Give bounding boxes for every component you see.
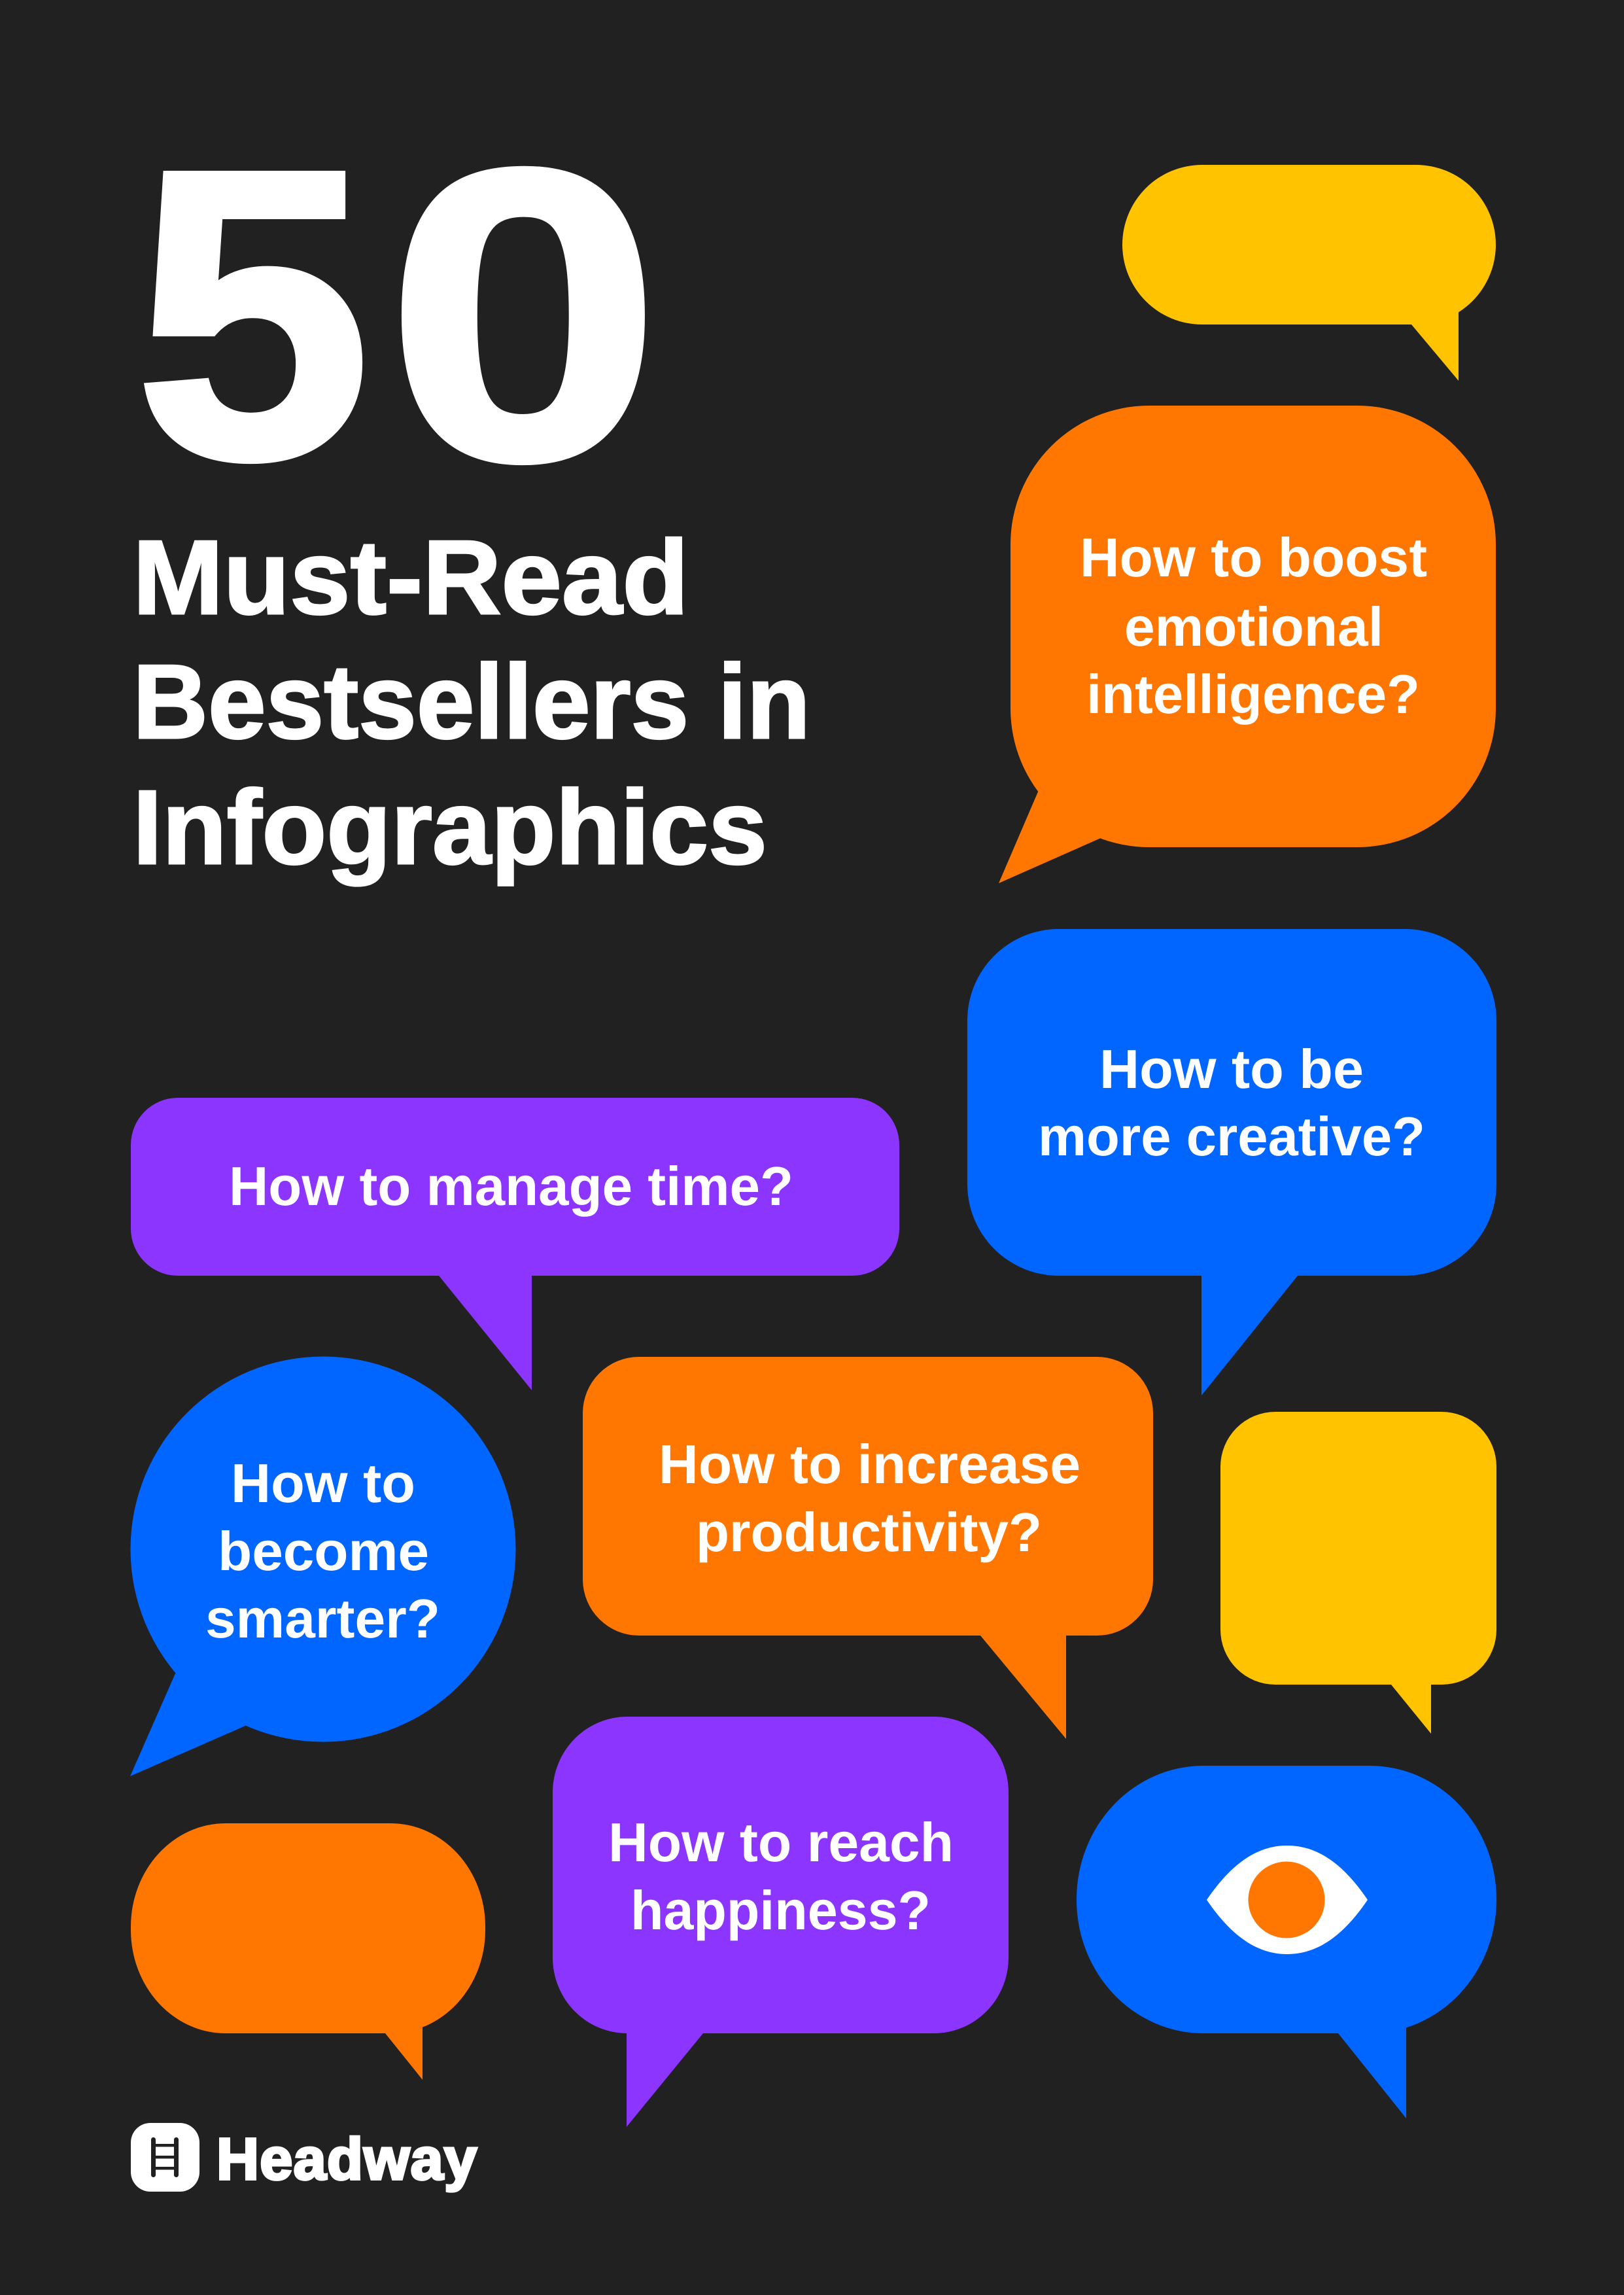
empty orange speech bubble, bottom left xyxy=(131,1823,485,2080)
orange speech bubble: increase productivity: How to increase xyxy=(659,1433,1080,1495)
purple speech bubble: manage time xyxy=(131,1098,899,1390)
orange speech bubble: emotional intelligence: emotional xyxy=(1124,596,1383,657)
blue speech bubble: more creative xyxy=(967,929,1496,1395)
orange speech bubble: emotional intelligence: intelligence? xyxy=(1086,663,1420,725)
blue round speech bubble: become smarter xyxy=(130,1357,515,1776)
blue speech bubble: more creative: How to be xyxy=(1099,1038,1364,1100)
blue round speech bubble: become smarter: smarter? xyxy=(205,1588,440,1649)
blue speech bubble: more creative: more creative? xyxy=(1038,1106,1425,1167)
orange speech bubble: emotional intelligence: How to boost xyxy=(1080,527,1427,588)
orange speech bubble: increase productivity: productivity? xyxy=(696,1501,1042,1563)
purple speech bubble: manage time: How to manage time? xyxy=(229,1155,793,1217)
icon: ladder badge xyxy=(131,2123,199,2192)
wordmark: Headway xyxy=(216,2127,477,2192)
blue round speech bubble: become smarter: become xyxy=(218,1520,429,1582)
blue round speech bubble: become smarter: How to xyxy=(231,1452,415,1514)
icon: eye xyxy=(1207,1846,1368,1954)
purple speech bubble: reach happiness xyxy=(553,1717,1009,2127)
title: Bestsellers in xyxy=(133,643,810,761)
big number 50 xyxy=(135,84,661,546)
purple speech bubble: reach happiness: How to reach xyxy=(608,1812,954,1873)
empty yellow speech bubble, right xyxy=(1220,1412,1496,1734)
orange speech bubble: emotional intelligence xyxy=(999,406,1496,883)
logo: Headway xyxy=(131,2123,477,2192)
purple speech bubble: reach happiness: happiness? xyxy=(631,1880,931,1941)
big number 50: 0 xyxy=(386,84,661,546)
empty yellow speech bubble, top xyxy=(1122,165,1496,381)
orange speech bubble: increase productivity xyxy=(583,1357,1153,1739)
blue speech bubble with eye icon xyxy=(1077,1766,1496,2118)
title xyxy=(133,519,810,886)
title: Infographics xyxy=(133,769,767,886)
title: Must-Read xyxy=(133,519,689,637)
big number 50: 5 xyxy=(135,85,371,544)
